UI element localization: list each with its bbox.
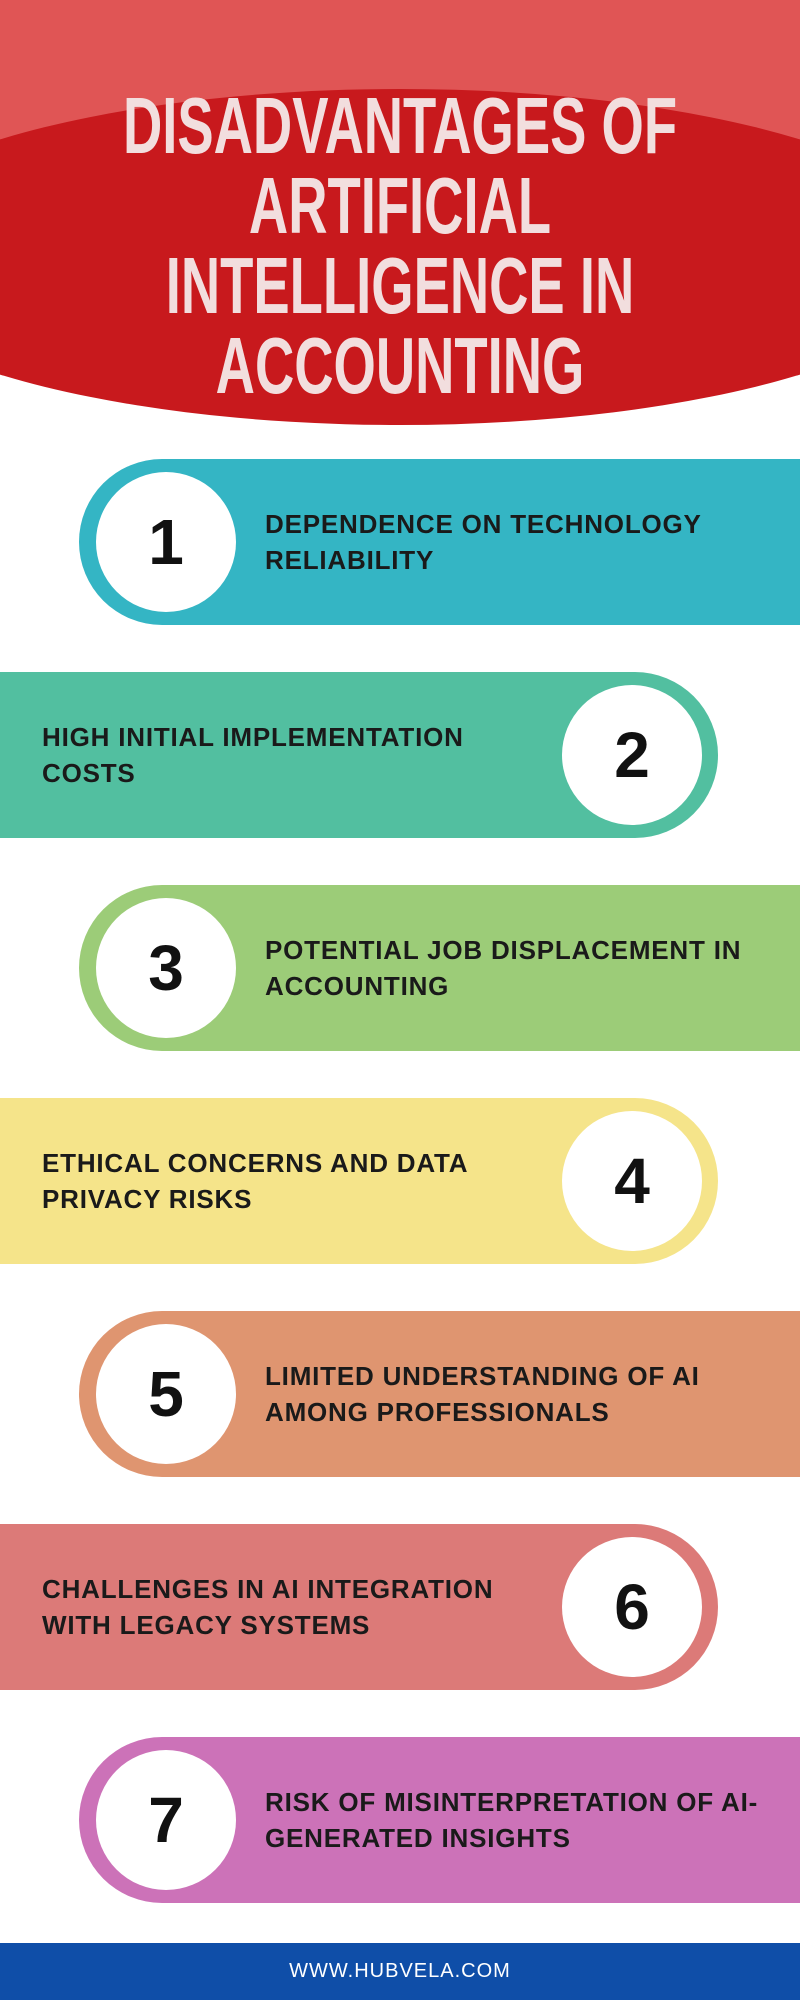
item 6: 6 — [614, 1571, 650, 1643]
item 5 — [79, 1311, 800, 1477]
item 2 — [0, 672, 718, 838]
item 7: 7 — [148, 1784, 184, 1856]
item 3: POTENTIAL JOB DISPLACEMENT IN ACCOUNTING — [265, 935, 741, 1001]
title: DISADVANTAGES OF — [123, 81, 677, 170]
footer — [0, 1943, 800, 2000]
item 4: ETHICAL CONCERNS AND DATA PRIVACY RISKS — [42, 1148, 467, 1214]
item 6 — [0, 1524, 718, 1690]
item 2: HIGH INITIAL IMPLEMENTATION COSTS — [42, 722, 464, 788]
item 5: LIMITED UNDERSTANDING OF AI AMONG PROFESSIONALS — [265, 1361, 700, 1427]
item 7: RISK OF MISINTERPRETATION OF AI-GENERATED INSIGHTS — [265, 1787, 758, 1853]
title: ACCOUNTING — [216, 321, 584, 410]
item 7 — [79, 1737, 800, 1903]
item 6: CHALLENGES IN AI INTEGRATION WITH LEGACY SYSTEMS — [42, 1574, 493, 1640]
item 4 — [0, 1098, 718, 1264]
item 3 — [79, 885, 800, 1051]
title — [123, 81, 677, 410]
item 3: 3 — [148, 932, 184, 1004]
item 1: DEPENDENCE ON TECHNOLOGY RELIABILITY — [265, 509, 701, 575]
title: ARTIFICIAL — [249, 161, 551, 250]
item 1 — [79, 459, 800, 625]
item 2: 2 — [614, 719, 650, 791]
title: INTELLIGENCE IN — [166, 241, 634, 330]
footer: WWW.HUBVELA.COM — [289, 1960, 511, 1982]
item 1: 1 — [148, 506, 184, 578]
item 4: 4 — [614, 1145, 650, 1217]
item 5: 5 — [148, 1358, 184, 1430]
header background — [0, 0, 800, 425]
